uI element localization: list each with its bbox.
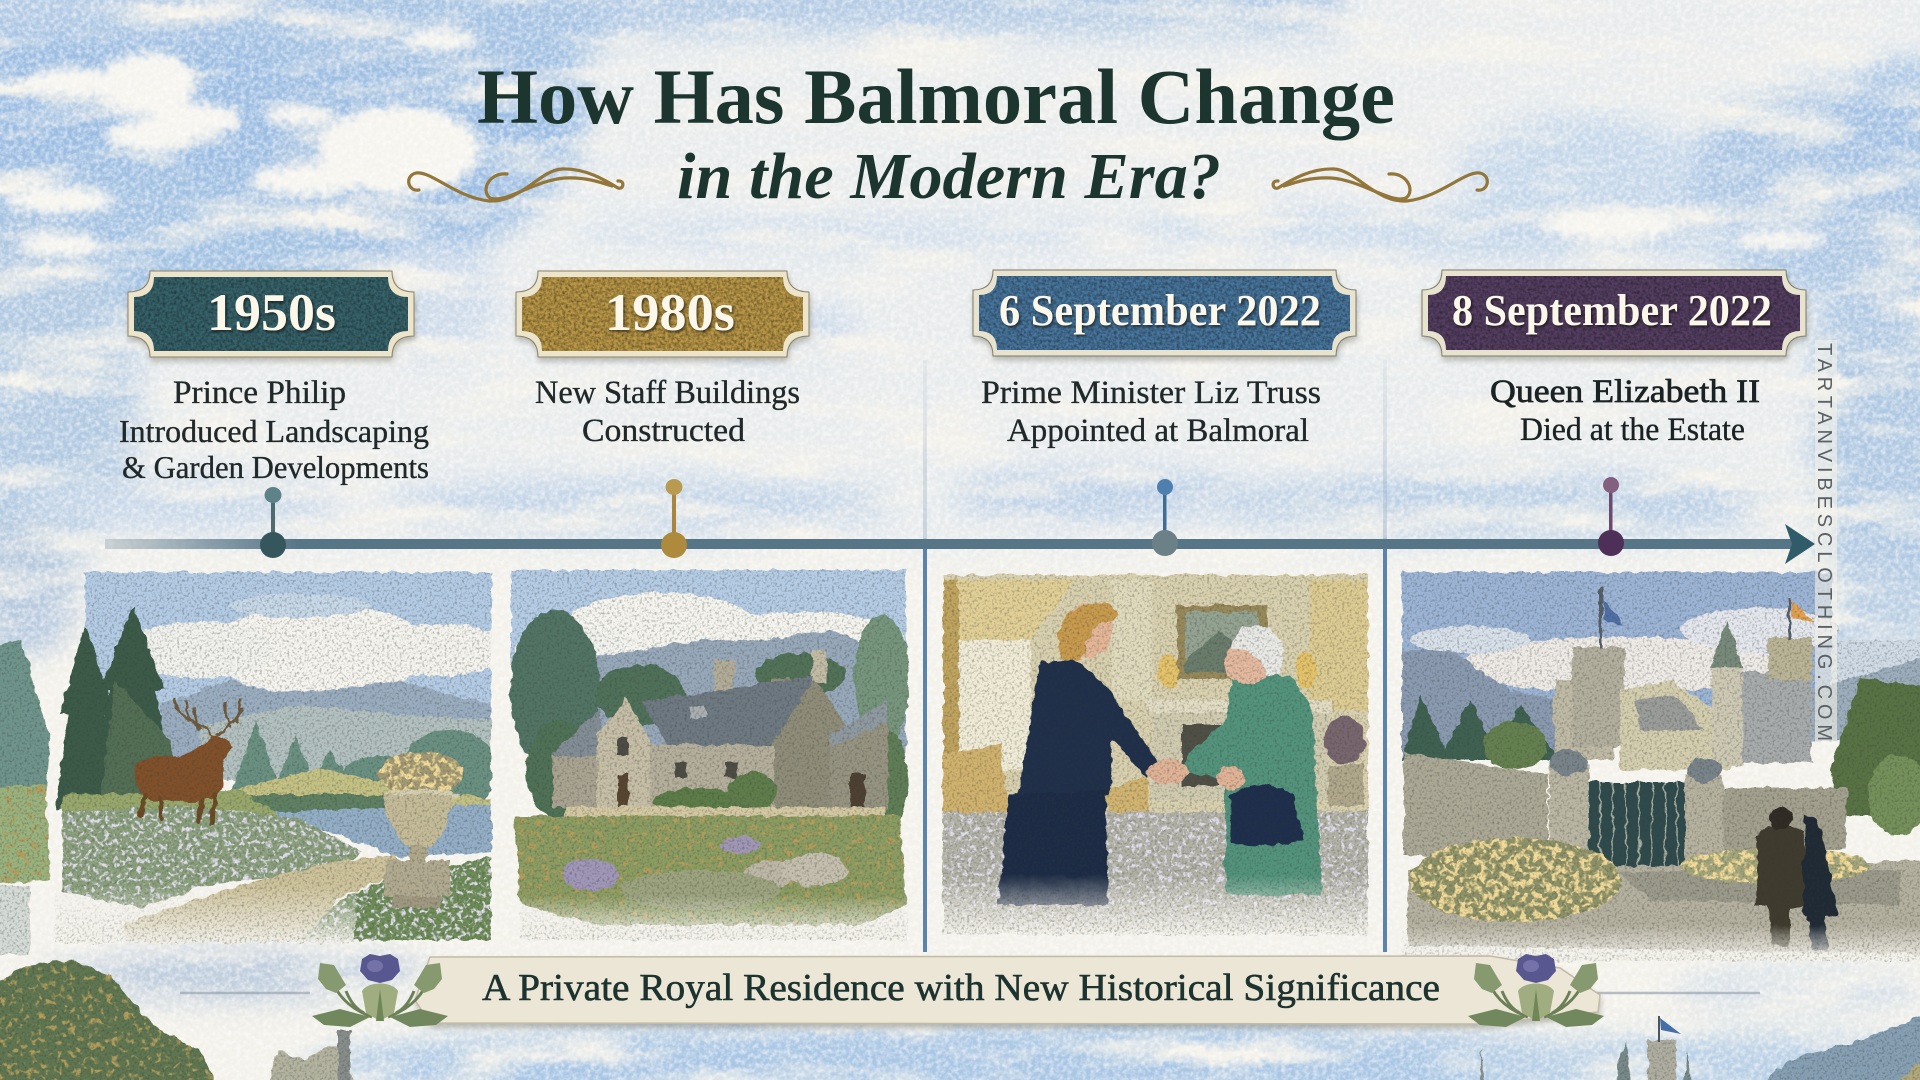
caption 8 September 2022: Died at the Estate [1520, 412, 1745, 448]
forest [1402, 695, 1560, 769]
title line 1: How Has Balmoral Change [477, 53, 1395, 140]
badge 1950s [128, 271, 414, 357]
handshake [1148, 759, 1188, 785]
badge 8 September 2022 [1422, 270, 1806, 356]
bottom landscape [0, 960, 1920, 1080]
badge 1950s: 1950s [207, 284, 336, 342]
white clouds [5, 30, 1825, 257]
chimneys [714, 660, 734, 700]
ornament: right flourish [1273, 169, 1487, 201]
framed painting [1177, 605, 1267, 679]
flag on castle [1658, 1016, 1681, 1042]
stag [135, 698, 242, 824]
fireplace [1147, 700, 1333, 800]
illustration panel: 8 September 2022 castle gates [1402, 572, 1920, 961]
arrowhead [1785, 524, 1815, 564]
gilded curtains [943, 580, 1075, 800]
caption 6 September 2022: Prime Minister Liz Truss [981, 375, 1321, 411]
illustration panel: 6 September 2022 audience [943, 575, 1368, 935]
caption 8 September 2022 [1490, 374, 1760, 448]
title [477, 53, 1395, 213]
Liz Truss figure [998, 602, 1158, 905]
badge 6 September 2022 [973, 270, 1356, 356]
badge 6 September 2022: 6 September 2022 [999, 286, 1321, 335]
stone wall [1404, 752, 1847, 860]
caption 1950s: Prince Philip [173, 375, 346, 411]
path [120, 855, 402, 945]
left edge trees [0, 640, 50, 955]
lodge bottom left [262, 1030, 368, 1080]
timeline axis [105, 524, 1815, 564]
caption 1950s: Introduced Landscaping [119, 413, 429, 449]
column: 1980s [516, 271, 809, 558]
flower bed [62, 806, 362, 908]
carpet [943, 812, 1368, 932]
mountains [580, 630, 906, 760]
right trees [1830, 678, 1920, 835]
timeline marker 8 September 2022 [1598, 477, 1624, 556]
mountains [1402, 650, 1560, 760]
water [265, 804, 495, 858]
thistle right [1468, 954, 1604, 1027]
thin banner rule [180, 992, 1760, 994]
sky [511, 570, 906, 695]
side panels [1112, 580, 1152, 700]
title line 2: in the Modern Era? [677, 140, 1221, 213]
vertical divider left [923, 360, 927, 952]
caption 1980s: Constructed [582, 413, 745, 449]
caption 1950s [119, 375, 429, 485]
parchment ribbon [415, 956, 1600, 1024]
house [552, 676, 888, 810]
shrubs [654, 788, 746, 816]
illustration panel: 1950s landscaped garden with stag [55, 572, 510, 945]
ornament: left flourish [409, 169, 623, 201]
sky [1402, 572, 1920, 742]
badge 1980s: 1980s [605, 284, 735, 342]
wall lamps [1157, 655, 1179, 689]
caption 1980s: New Staff Buildings [535, 375, 800, 411]
banner text: A Private Royal Residence with New Historical Significance [482, 967, 1440, 1009]
meadow [234, 768, 491, 807]
hill bottom right [1730, 1005, 1920, 1080]
badge 8 September 2022: 8 September 2022 [1452, 286, 1772, 335]
stone urn with flowers [379, 751, 463, 908]
caption 6 September 2022: Appointed at Balmoral [1007, 413, 1309, 449]
back trees [595, 665, 685, 725]
castle [1554, 586, 1814, 770]
floral tributes [1409, 838, 1870, 922]
column: 8 September 2022 [1422, 270, 1806, 556]
thistle left [312, 954, 448, 1027]
room wall [943, 575, 1368, 815]
banner [312, 954, 1604, 1027]
left tree [510, 610, 600, 770]
garden [515, 816, 906, 925]
road [1408, 860, 1920, 955]
column: 6 September 2022 [973, 270, 1356, 556]
foreground bush [300, 855, 495, 940]
watermark: TARTANVIBESCLOTHING.COM [1813, 343, 1835, 741]
gold chair [943, 745, 1148, 830]
foliage bottom left [0, 960, 228, 1080]
illustration panel: 1980s stone staff buildings [510, 570, 910, 940]
timeline marker 1980s [661, 479, 687, 558]
couple of mourners [1756, 807, 1838, 950]
drive [565, 807, 885, 817]
badge 1980s [516, 271, 809, 357]
mountains [160, 680, 492, 758]
Queen Elizabeth figure [1180, 625, 1322, 895]
conifers [55, 605, 175, 810]
sky [84, 570, 493, 718]
timeline marker 1950s [260, 487, 286, 558]
bottom fade [55, 885, 355, 945]
side flowers [1325, 716, 1365, 764]
right tree [854, 615, 910, 745]
distant forest [232, 720, 492, 800]
castle bottom right [1478, 1040, 1695, 1080]
grass [60, 789, 279, 818]
column: 1950s [119, 271, 429, 558]
caption 8 September 2022: Queen Elizabeth II [1490, 374, 1760, 410]
caption 1980s [535, 375, 800, 449]
iron gate [1589, 782, 1685, 872]
vertical divider right [1383, 360, 1387, 952]
rocks [745, 861, 795, 889]
gate piers [1549, 749, 1723, 870]
caption 1950s: & Garden Developments [122, 449, 429, 485]
timeline marker 6 September 2022 [1152, 479, 1178, 556]
caption 6 September 2022 [981, 375, 1321, 449]
